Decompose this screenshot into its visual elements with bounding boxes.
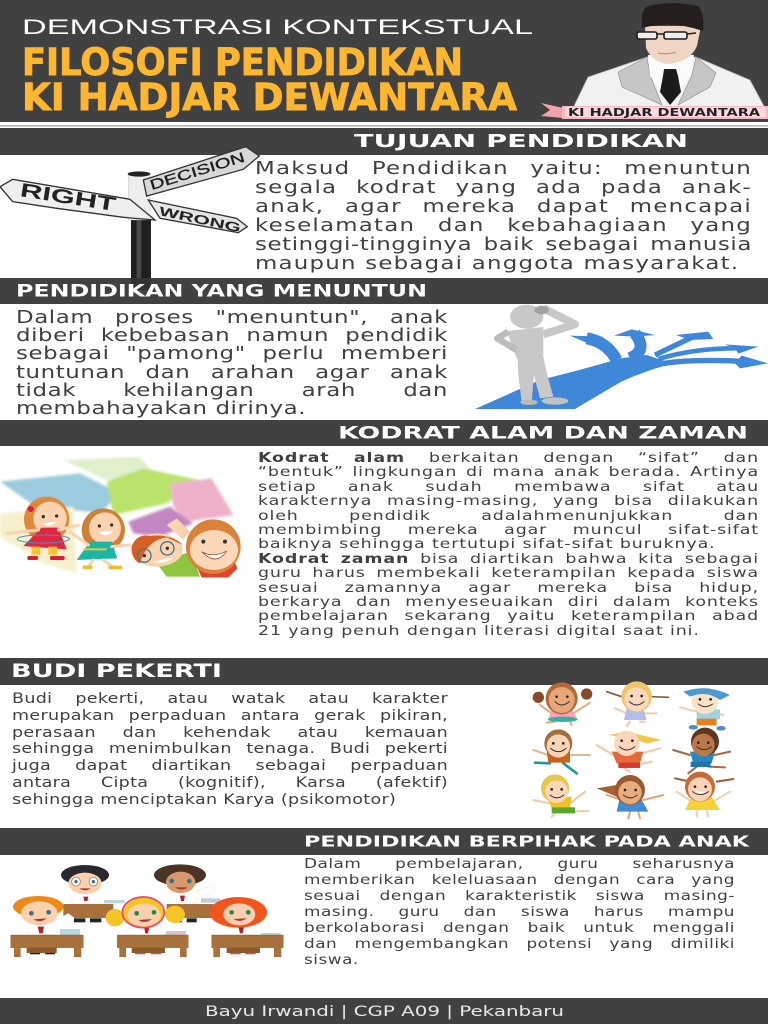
text block: kodrat alam dan zaman: sesuai zamannya agar mereka bisa hidup, [258,581,759,596]
header banner [0,0,768,122]
text block: budi pekerti [12,691,448,808]
text block: kodrat alam dan zaman: membimbing mereka agar muncul sifat-sifat [258,523,759,538]
text block: kodrat alam dan zaman [258,451,759,639]
text block: kodrat alam dan zaman: “bentuk” lingkungan di mana anak berada. Artinya [258,465,759,480]
text block: budi pekerti: Budi pekerti, atau watak atau karakter [12,691,448,707]
pupil girl front [106,897,186,954]
text block: kodrat alam dan zaman: pembelajaran sekarang yaitu keterampilan abad [258,609,759,624]
text block: pendidikan yang menuntun: Dalam proses "menuntun", anak [16,308,448,328]
text block: budi pekerti: perasaan dan kehendak atau kemauan [12,725,448,741]
girl with hoop [7,497,78,560]
child 3 [680,687,730,731]
text block: kodrat alam dan zaman: Kodrat zaman bisa diartikan bahwa kita sebagai [258,552,759,567]
child 7 [533,774,588,817]
text block: pendidikan berpihak pada anak: berkolaborasi dengan baik untuk menggali [304,920,735,936]
text block: kodrat alam dan zaman: setiap anak sudah membawa sifat atau [258,480,759,495]
text block: pendidikan berpihak pada anak: dan mengembangkan potensi yang dimiliki [304,936,735,952]
child 4 [533,729,590,773]
sign: wrong [148,200,247,235]
text block: pendidikan yang menuntun: sebagai "pamong" perlu memberi [16,344,448,364]
pupil red hair front [210,897,281,954]
pupil with glasses [61,865,109,922]
section bar: pendidikan yang menuntun [0,278,768,304]
text block: pendidikan berpihak pada anak: siswa. [304,952,359,968]
sign: decision: DECISION [148,149,247,193]
text block: pendidikan berpihak pada anak: sesuai dengan karakteristik siswa masing- [304,888,735,904]
illustration: figure at branching arrows [475,305,768,409]
text block: tujuan pendidikan: setinggi-tingginya baik sebagai manusia [255,235,752,255]
name ribbon: KI HADJAR DEWANTARA [568,107,761,119]
section bar: tujuan pendidikan [0,128,768,155]
name ribbon [541,103,768,119]
header title [22,41,517,119]
child 6 [673,728,730,773]
text block: kodrat alam dan zaman: oleh pendidik adalahmenunjukkan dan [258,509,759,524]
sign: wrong: WRONG [158,204,242,235]
portrait of Ki Hadjar Dewantara [573,3,765,108]
illustration: pupils at desks [11,864,283,957]
blue arrows [475,329,768,409]
illustration: colourful children [0,457,241,577]
child 2 [607,681,668,726]
text block: tujuan pendidikan [255,159,752,274]
sign: right [0,179,155,220]
text block: budi pekerti: antara Cipta (kognitif), Karsa (afektif) [12,775,448,791]
section bar: budi pekerti: BUDI PEKERTI [11,661,222,682]
thinking figure [497,305,575,405]
text block: pendidikan berpihak pada anak: memberikan keleluasaan dengan cara yang [304,872,735,888]
sign: right: RIGHT [19,180,118,216]
child 1 [533,682,592,725]
footer bar [0,998,768,1024]
text block: tujuan pendidikan: anak, agar mereka dapat mencapai [255,197,752,217]
pupil left front [13,896,80,954]
boy with glasses [131,533,200,577]
boy with raised hand [167,518,241,577]
text block: tujuan pendidikan: keselamatan dan kebahagiaan yang [255,216,752,236]
text block: budi pekerti: merupakan perpaduan antara gerak pikiran, [12,708,448,724]
colourful star background [0,457,233,573]
text block: budi pekerti: juga dapat diartikan sebagai perpaduan [12,758,448,774]
text block: kodrat alam dan zaman: baiknya sehingga tertutupi sifat-sifat buruknya. [258,537,716,552]
sign: decision [143,147,259,196]
text block: pendidikan yang menuntun: membahayakan dirinya. [16,399,306,419]
section bar: kodrat alam dan zaman: KODRAT ALAM DAN ZAMAN [338,424,748,442]
illustration: signpost [0,147,259,290]
text block: pendidikan yang menuntun: diberi kebebasan namun pendidik [16,326,448,346]
text block: pendidikan berpihak pada anak: masing. guru dan siswa harus mampu [304,904,735,920]
text block: budi pekerti: sehingga menimbulkan tenaga. Budi pekerti [12,741,448,757]
section bar: pendidikan berpihak pada anak: PENDIDIKAN BERPIHAK PADA ANAK [304,832,750,850]
text block: pendidikan yang menuntun: tuntunan dan arahan agar anak [16,363,448,383]
text block: kodrat alam dan zaman: Kodrat alam berkaitan dengan “sifat” dan [258,451,759,466]
text block: kodrat alam dan zaman: karakternya masing-masing, yang bisa dilakukan [258,494,759,509]
header title: KI HADJAR DEWANTARA [22,76,517,119]
text block: tujuan pendidikan: maupun sebagai anggota masyarakat. [255,254,739,274]
text block: pendidikan yang menuntun [16,308,448,419]
text block: budi pekerti: sehingga menciptakan Karya (psikomotor) [12,792,396,808]
section bar: budi pekerti [0,658,768,685]
text block: pendidikan yang menuntun: tidak kehilangan arah dan [16,381,448,401]
pupil with raised hand, back [154,864,215,922]
text block: kodrat alam dan zaman: berkarya dan menyeseuaikan diri dalam konteks [258,595,759,610]
section bar: tujuan pendidikan: TUJUAN PENDIDIKAN [354,131,688,152]
section bar: pendidikan yang menuntun: PENDIDIKAN YANG MENUNTUN [16,282,427,300]
illustration: nine cheerful children [533,681,733,818]
front desks [11,935,283,957]
header title: FILOSOFI PENDIDIKAN [22,41,463,84]
back row desk [63,898,220,918]
child 5 [597,731,662,772]
section bar: kodrat alam dan zaman [0,420,768,446]
text block: kodrat alam dan zaman: 21 yang penuh dengan literasi digital saat ini. [258,624,700,639]
text block: pendidikan berpihak pada anak: Dalam pembelajaran, guru seharusnya [304,856,735,872]
child 9 [675,772,733,817]
text block: pendidikan berpihak pada anak [304,856,735,968]
footer bar: Bayu Irwandi | CGP A09 | Pekanbaru [205,1004,564,1020]
text block: kodrat alam dan zaman: guru harus membekali keterampilan kepada siswa [258,566,759,581]
section bar: pendidikan berpihak pada anak [0,828,768,855]
child 8 [597,775,663,818]
girl in teal dress [70,508,130,569]
text block: tujuan pendidikan: Maksud Pendidikan yaitu: menuntun [255,159,752,179]
header subtitle: DEMONSTRASI KONTEKSTUAL [22,15,533,39]
text block: tujuan pendidikan: segala kodrat yang ada pada anak- [255,178,752,198]
